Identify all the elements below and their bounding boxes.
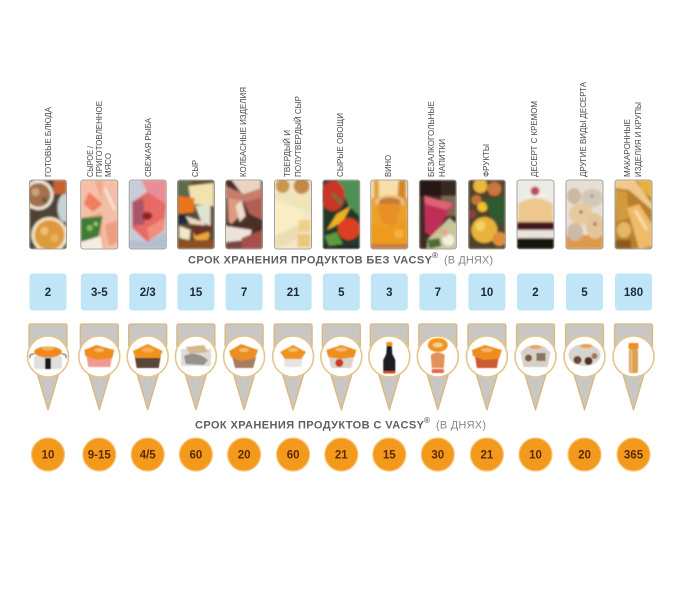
label: твердый и полутвердый сыр: ПОЛУТВЕРДЫЙ СЫР xyxy=(294,96,303,177)
label: макаронные изделия и крупы: ИЗДЕЛИЯ И КРУПЫ xyxy=(634,102,643,177)
value circle 30 xyxy=(421,438,454,471)
value circle 9-15 xyxy=(83,438,116,471)
heading: срок хранения без VACSY xyxy=(188,251,493,266)
value circle 30: 30 xyxy=(431,450,444,462)
value circle 10 xyxy=(519,438,552,471)
label: безалкогольные напитки: НАПИТКИ xyxy=(438,139,447,177)
heading: срок хранения с VACSY: СРОК ХРАНЕНИЯ ПРОДУКТОВ С VACSY xyxy=(195,420,425,432)
photo: фрукты xyxy=(468,179,506,249)
photo: готовые блюда xyxy=(29,180,67,250)
pin: банка xyxy=(417,324,458,410)
value box 5 xyxy=(566,274,603,310)
pin: кастрюля xyxy=(28,324,68,410)
pin: высокий контейнер xyxy=(613,324,654,410)
blue boxes: days without VACSY xyxy=(30,274,652,310)
value box 3-5: 3-5 xyxy=(91,287,108,299)
pin: контейнер с твердым сыром xyxy=(273,324,314,410)
heading: срок хранения с VACSY: (В ДНЯХ) xyxy=(436,420,486,432)
value circle 20 xyxy=(568,438,601,471)
heading: срок хранения без VACSY: (В ДНЯХ) xyxy=(444,254,493,266)
label: безалкогольные напитки: БЕЗАЛКОГОЛЬНЫЕ xyxy=(427,101,436,177)
value box 7: 7 xyxy=(241,287,247,299)
label: другие виды десерта: ДРУГИЕ ВИДЫ ДЕСЕРТА xyxy=(579,81,588,177)
photo: сыр xyxy=(177,180,214,249)
pin: бутылка xyxy=(369,324,410,410)
label: свежая рыба: СВЕЖАЯ РЫБА xyxy=(144,117,153,177)
value box 5: 5 xyxy=(338,287,345,299)
label: колбасные изделия: КОЛБАСНЫЕ ИЗДЕЛИЯ xyxy=(239,87,248,177)
label: сырое / приготовленное мясо xyxy=(86,101,113,177)
value circle 21: 21 xyxy=(335,450,348,462)
heading: срок хранения с VACSY xyxy=(195,416,486,432)
value box 10: 10 xyxy=(481,287,493,299)
pin: контейнер с сыром xyxy=(175,324,216,410)
value box 2 xyxy=(30,274,66,310)
value circle 10 xyxy=(32,438,64,471)
label: твердый и полутвердый сыр: ТВЕРДЫЙ И xyxy=(283,130,292,177)
label: макаронные изделия и крупы: МАКАРОННЫЕ xyxy=(623,119,632,177)
value circle 4/5 xyxy=(131,438,164,471)
label: вино: ВИНО xyxy=(384,155,393,177)
value circle 60: 60 xyxy=(287,450,299,462)
value circle 60 xyxy=(277,438,310,471)
heading: срок хранения без VACSY: ® xyxy=(432,251,438,260)
value circle 20 xyxy=(228,438,261,471)
value circle 9-15: 9-15 xyxy=(88,450,111,462)
value box 7: 7 xyxy=(435,287,441,299)
value box 5: 5 xyxy=(581,287,588,299)
VACSY container pins xyxy=(28,324,654,410)
photo: овощи xyxy=(321,180,360,249)
label: сыр: СЫР xyxy=(191,160,200,177)
value circle 10: 10 xyxy=(529,450,542,462)
value circle 60 xyxy=(179,438,212,471)
pin: контейнер с мясом xyxy=(79,324,120,410)
label: сырое / приготовленное мясо: СЫРОЕ / xyxy=(86,145,95,177)
value box 7 xyxy=(226,274,263,310)
label: макаронные изделия и крупы xyxy=(623,102,643,177)
photo: вино xyxy=(371,180,408,249)
value box 3 xyxy=(371,274,408,310)
value box 2: 2 xyxy=(45,287,51,299)
value circle 15: 15 xyxy=(383,450,396,462)
value circle 365 xyxy=(617,438,650,471)
label: фрукты: ФРУКТЫ xyxy=(482,144,491,177)
label: сырые овощи: СЫРЫЕ ОВОЩИ xyxy=(336,113,345,177)
value box 2 xyxy=(517,274,554,310)
label: десерт с кремом: ДЕСЕРТ С КРЕМОМ xyxy=(530,101,539,177)
label: твердый и полутвердый сыр xyxy=(283,96,303,177)
value circle 20: 20 xyxy=(578,450,591,462)
photo: десерт с кремом xyxy=(517,180,554,249)
value box 15: 15 xyxy=(190,287,203,299)
photo: рыба xyxy=(129,180,166,249)
value circle 20: 20 xyxy=(238,450,250,462)
value box 21 xyxy=(275,274,312,310)
pin: контейнер с фруктами xyxy=(466,324,507,410)
value circle 365: 365 xyxy=(624,450,644,462)
value circle 21 xyxy=(325,438,358,471)
heading: срок хранения с VACSY: ® xyxy=(424,416,430,425)
photo: твердый сыр xyxy=(275,178,312,249)
label: сырое / приготовленное мясо: МЯСО xyxy=(104,153,113,177)
value box 7 xyxy=(419,274,456,310)
photo: колбасы xyxy=(226,180,263,249)
photo: другие десерты xyxy=(566,180,604,249)
value circle 21: 21 xyxy=(481,450,494,462)
value circle 21 xyxy=(470,438,503,471)
label: готовые блюда: ГОТОВЫЕ БЛЮДА xyxy=(44,106,53,177)
value circle 4/5: 4/5 xyxy=(140,450,156,462)
label: сырое / приготовленное мясо: ПРИГОТОВЛЕННОЕ xyxy=(95,101,104,177)
pin: контейнер с рыбой xyxy=(127,324,168,410)
pin: контейнер с колбасой xyxy=(224,324,265,410)
orange circles: days with VACSY xyxy=(32,438,650,471)
value box 10 xyxy=(468,274,505,310)
pin: контейнер с печеньем xyxy=(564,324,605,410)
column labels xyxy=(44,81,643,177)
value box 2/3: 2/3 xyxy=(140,287,156,299)
pin: контейнер с овощами xyxy=(321,324,362,410)
value box 5 xyxy=(323,274,360,310)
value box 2: 2 xyxy=(532,287,539,299)
photo: напитки xyxy=(419,180,456,249)
value circle 10: 10 xyxy=(42,450,54,462)
value box 2/3 xyxy=(129,274,166,310)
photo: макароны и крупы xyxy=(615,180,652,249)
food photos row xyxy=(24,178,652,253)
value box 3: 3 xyxy=(386,287,393,299)
value box 21: 21 xyxy=(287,287,300,299)
value box 15 xyxy=(177,274,214,310)
label: безалкогольные напитки xyxy=(427,101,447,177)
value box 3-5 xyxy=(81,274,118,310)
value circle 15 xyxy=(373,438,406,471)
value circle 60: 60 xyxy=(190,450,202,462)
photo: мясо xyxy=(81,180,118,249)
heading: срок хранения без VACSY: СРОК ХРАНЕНИЯ ПРОДУКТОВ БЕЗ VACSY xyxy=(188,254,433,266)
value box 180: 180 xyxy=(624,287,643,299)
pin: контейнер с десертом xyxy=(515,324,556,410)
value box 180 xyxy=(615,274,652,310)
